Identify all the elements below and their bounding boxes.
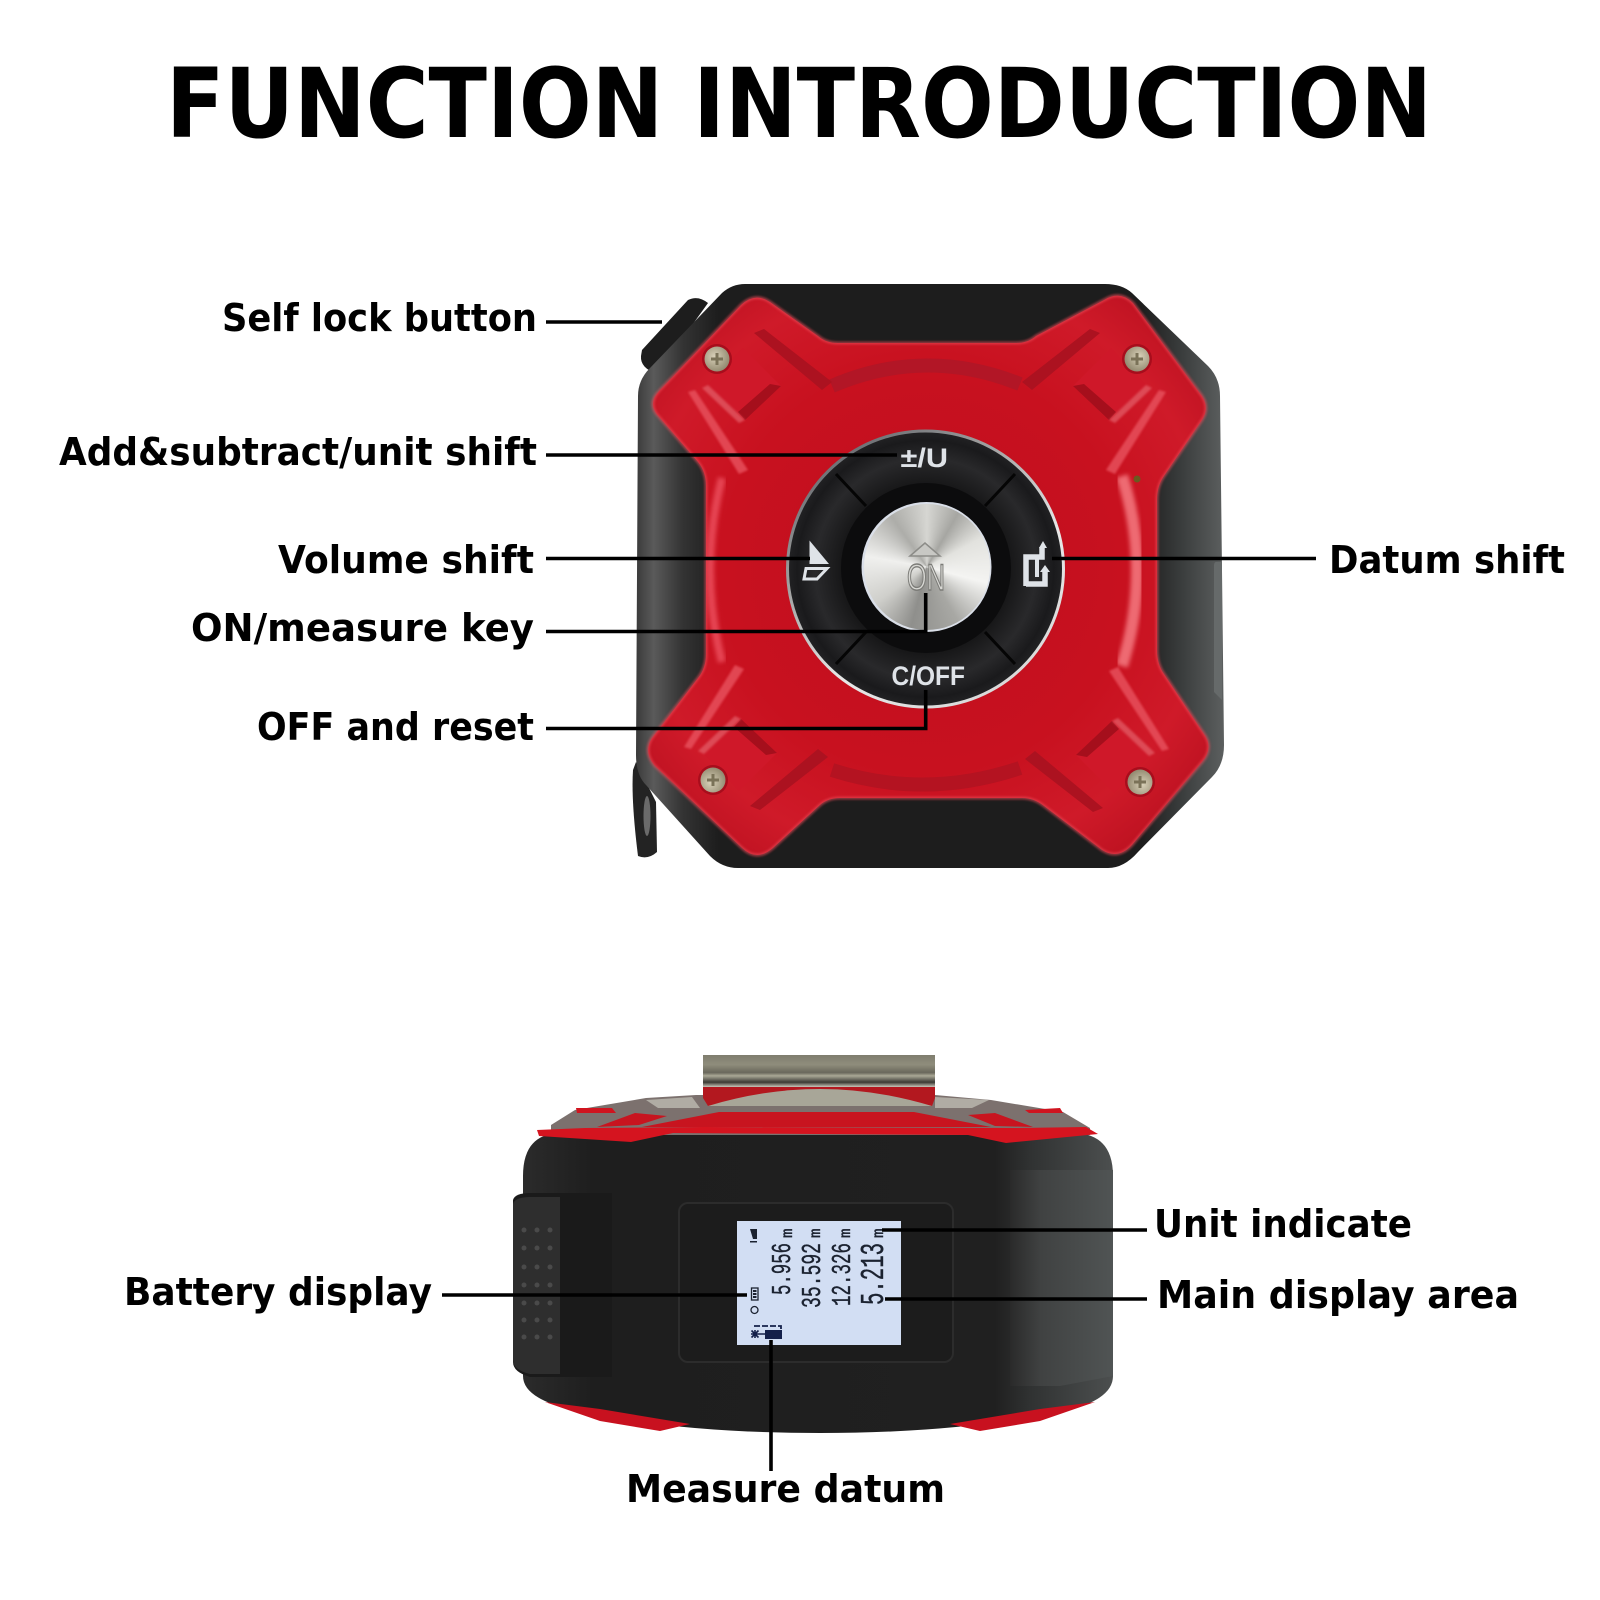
disc bevels <box>832 365 1020 386</box>
icon: volume <box>804 540 829 579</box>
belt clip <box>703 1055 935 1106</box>
reading 3: m <box>837 1228 855 1238</box>
lower red flanks <box>545 1402 1095 1431</box>
black housing <box>636 284 1224 868</box>
label: unit indicate: Unit indicate <box>1154 1202 1412 1247</box>
right grey panel <box>1010 1170 1113 1386</box>
icon: datum shift <box>1026 541 1050 586</box>
measure datum icon <box>751 1326 782 1339</box>
red cover rim light <box>648 296 1209 855</box>
label: battery display: Battery display <box>124 1270 432 1315</box>
label: measure datum: Measure datum <box>626 1467 945 1512</box>
label: on measure key: ON/measure key <box>191 606 534 651</box>
hook <box>633 762 657 857</box>
top cover <box>537 1095 1098 1143</box>
corner pads and screws <box>684 329 1169 812</box>
reading 2: m <box>807 1228 825 1238</box>
device: front view of laser tape measure <box>633 284 1224 868</box>
side slot <box>1214 562 1222 700</box>
reading 4 main: m <box>870 1228 888 1238</box>
button label: add subtract unit: ±/U <box>900 443 948 473</box>
side grip <box>513 1193 612 1377</box>
small hole <box>1134 476 1140 482</box>
battery icon <box>752 1288 758 1300</box>
signal icon <box>750 1229 757 1242</box>
title: FUNCTION INTRODUCTION <box>166 48 1432 160</box>
leader lines: front view <box>546 322 1316 728</box>
button label: clear off: C/OFF <box>892 661 965 691</box>
reading 4 main: 5.213 <box>856 1243 893 1305</box>
reading 1: 5.956 <box>769 1243 799 1295</box>
hook hole <box>644 796 650 836</box>
LCD screen <box>737 1221 901 1345</box>
person icon <box>751 1306 758 1314</box>
black housing <box>523 1133 1113 1433</box>
display recess <box>679 1203 953 1362</box>
label: add and subtract unit shift: Add&subtract/unit shift <box>59 430 537 475</box>
leader lines: side view <box>442 1230 1147 1471</box>
label: off and reset: OFF and reset <box>257 705 534 750</box>
ON metal button <box>862 502 992 632</box>
reading 3: 12.326 <box>829 1243 859 1306</box>
ON metal button: ON <box>907 557 945 598</box>
label: main display area: Main display area <box>1157 1273 1519 1318</box>
device: side view with display <box>513 1055 1113 1433</box>
label: datum shift: Datum shift <box>1329 538 1565 583</box>
self lock slider <box>641 298 708 374</box>
reading 2: 35.592 <box>799 1243 829 1308</box>
red cover <box>648 296 1209 855</box>
label: volume shift: Volume shift <box>278 538 534 583</box>
button ring <box>786 430 1065 708</box>
label: self lock button: Self lock button <box>222 296 537 341</box>
reading 1: m <box>779 1228 797 1238</box>
